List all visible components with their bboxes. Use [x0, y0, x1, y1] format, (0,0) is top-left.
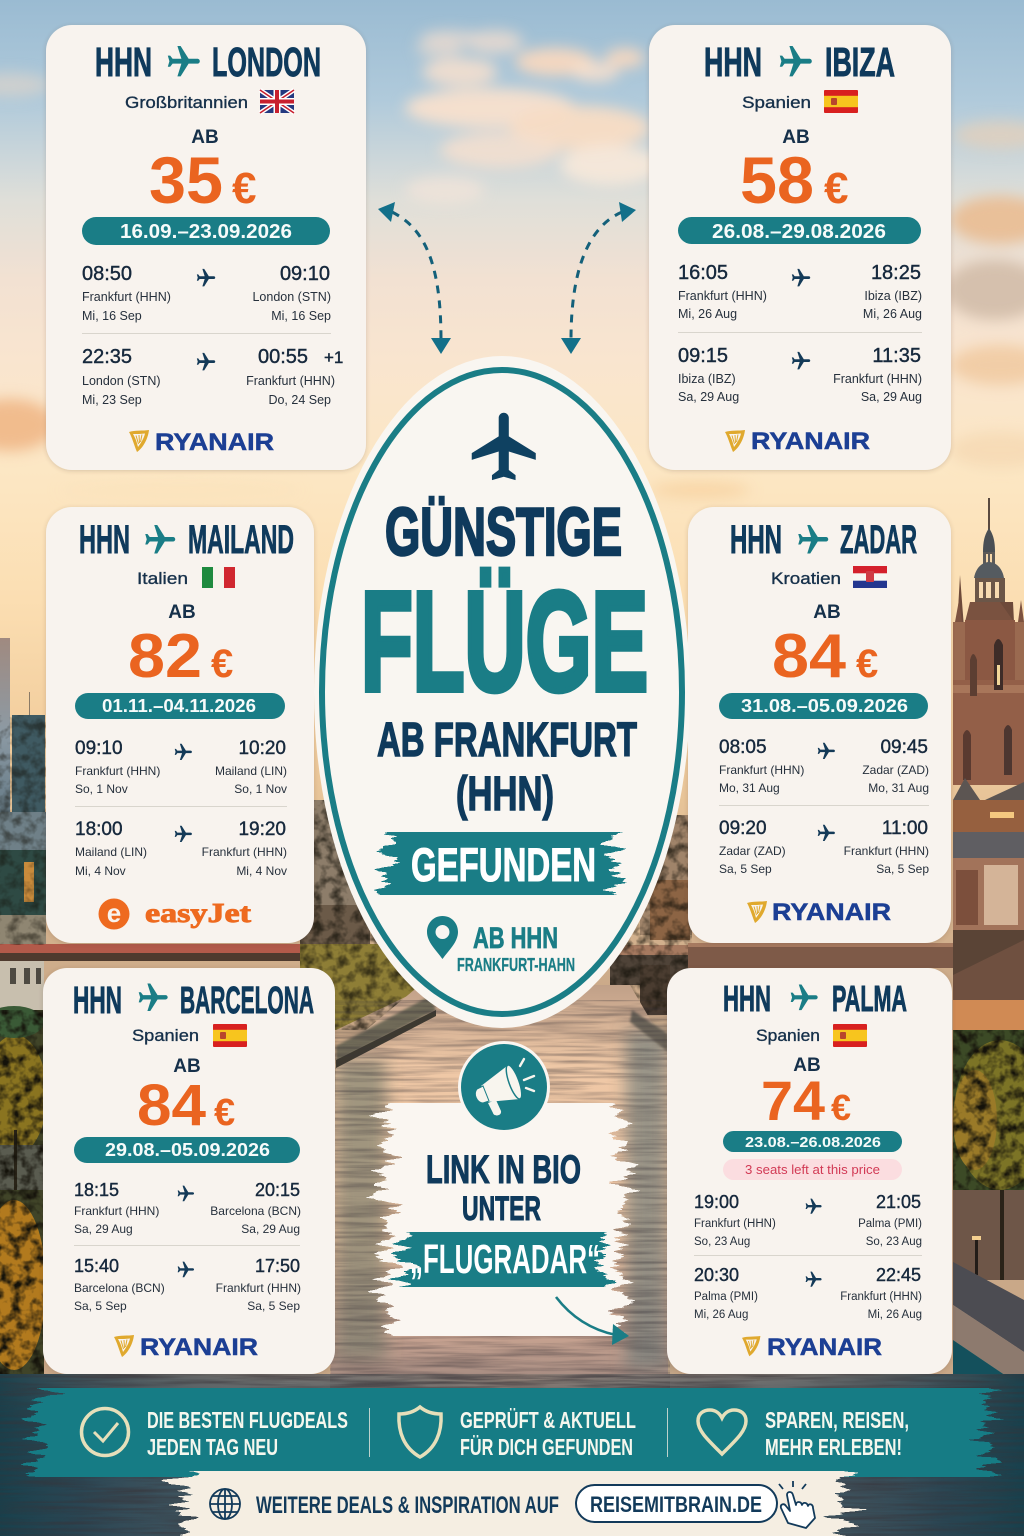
return flight: [74, 1256, 301, 1313]
card background: [43, 968, 335, 1374]
outbound flight: [75, 738, 287, 796]
route heading: HHN: [704, 39, 762, 85]
return flight: Sa, 29 Aug: [861, 390, 922, 404]
return flight: 20:30: [694, 1265, 739, 1285]
price: 35: [149, 143, 223, 217]
price: 82: [128, 622, 202, 691]
outbound flight: [82, 263, 331, 323]
return flight: London (STN): [82, 374, 161, 388]
outbound flight: Sa, 29 Aug: [241, 1222, 300, 1236]
origin: ab HHN: AB HHN: [473, 922, 558, 955]
brush banner: Flugradar: „FLUGRADAR“: [410, 1236, 600, 1282]
oval teal ring: [322, 370, 682, 1014]
availability notice: [723, 1159, 902, 1180]
price: AB: [191, 127, 219, 148]
outbound flight: Frankfurt (HHN): [75, 764, 160, 778]
outbound flight: [719, 737, 929, 795]
route heading: MAILAND: [188, 518, 294, 562]
benefit: daily deals: JEDEN TAG NEU: [147, 1434, 278, 1460]
text: unter: UNTER: [462, 1190, 541, 1228]
outbound flight: 10:20: [238, 738, 286, 759]
text: link in bio: LINK IN BIO: [426, 1148, 581, 1192]
country and flag: [125, 90, 294, 113]
return flight: 11:00: [882, 818, 928, 839]
route heading: [73, 980, 314, 1022]
return flight: Do, 24 Sep: [268, 393, 331, 407]
route heading: IBIZA: [825, 39, 895, 85]
price: €: [214, 1092, 235, 1134]
card background: [688, 507, 951, 943]
benefit: save and travel: SPAREN, REISEN,: [765, 1407, 909, 1433]
panel: London deal: [46, 25, 366, 470]
panel: central oval title badge: [314, 356, 690, 1028]
outbound flight: 18:15: [74, 1180, 119, 1200]
price: AB: [173, 1056, 201, 1077]
date pill: [723, 1131, 902, 1152]
card background: [649, 25, 951, 470]
country and flag: Spanien: [742, 93, 811, 112]
outbound flight: 08:50: [82, 263, 132, 285]
route heading: HHN: [73, 980, 122, 1022]
country and flag: [771, 566, 887, 588]
return flight: Frankfurt (HHN): [202, 845, 287, 859]
date pill: [74, 1137, 300, 1163]
price: AB: [793, 1055, 821, 1076]
panel: Palma deal: [667, 968, 952, 1374]
price: 74: [761, 1069, 825, 1132]
return flight: Sa, 5 Sep: [247, 1299, 300, 1313]
route heading: [730, 518, 917, 562]
outbound flight: Mailand (LIN): [215, 764, 287, 778]
route heading: BARCELONA: [180, 980, 314, 1022]
bottom water: [0, 1374, 1024, 1536]
brush banner: Flugradar: [403, 1232, 605, 1287]
outbound flight: Mi, 16 Sep: [82, 309, 142, 323]
return flight: Sa, 5 Sep: [719, 862, 772, 876]
country and flag: Spanien: [132, 1026, 199, 1045]
outbound flight: 08:05: [719, 737, 767, 758]
outbound flight: Frankfurt (HHN): [82, 290, 171, 304]
country and flag: [756, 1024, 867, 1047]
Ryanair logo: RYANAIR: [772, 899, 891, 926]
brush background: [36, 1388, 988, 1477]
country and flag: Großbritannien: [125, 93, 248, 112]
price: €: [856, 642, 878, 686]
price: €: [211, 642, 233, 686]
outbound flight: 09:45: [880, 737, 928, 758]
panel: Mailand deal: [46, 507, 314, 943]
price: [137, 1056, 235, 1138]
card background: [46, 507, 314, 943]
panel: website footer: [182, 1471, 844, 1536]
price: [149, 127, 256, 217]
panel: Barcelona deal: [43, 968, 335, 1374]
panel: link in bio: [386, 1041, 629, 1345]
return flight: Zadar (ZAD): [719, 844, 786, 858]
outbound flight: Mo, 31 Aug: [719, 781, 780, 795]
outbound flight: So, 1 Nov: [75, 782, 128, 796]
outbound flight: Frankfurt (HHN): [678, 289, 767, 303]
brush banner: gefunden: GEFUNDEN: [411, 838, 596, 891]
icon: megaphone: [458, 1041, 550, 1133]
route heading: [723, 978, 907, 1019]
availability notice: 3 seats left at this price: [745, 1162, 880, 1177]
return flight: [678, 345, 922, 404]
outbound flight: Mi, 26 Aug: [678, 307, 737, 321]
clouds: [0, 30, 1024, 498]
return flight: Frankfurt (HHN): [840, 1291, 922, 1303]
outbound flight: 18:25: [871, 262, 921, 284]
easyJet logo: [98, 898, 251, 930]
heading: HHN: (HHN): [456, 768, 554, 821]
outbound flight: 16:05: [678, 262, 728, 284]
return flight: Mi, 4 Nov: [75, 864, 126, 878]
route heading: [95, 39, 321, 85]
icon: globe: [210, 1489, 240, 1519]
heading: Günstige: GÜNSTIGE: [385, 494, 622, 570]
outbound flight: So, 1 Nov: [234, 782, 287, 796]
return flight: Palma (PMI): [694, 1291, 758, 1303]
return flight: Frankfurt (HHN): [246, 374, 335, 388]
outbound flight: So, 23 Aug: [866, 1236, 922, 1248]
city behind oval: [312, 800, 362, 930]
route heading: HHN: [730, 518, 782, 562]
price: AB: [168, 602, 196, 623]
return flight: 09:20: [719, 818, 767, 839]
Ryanair logo: RYANAIR: [155, 429, 274, 456]
button: website: [576, 1485, 777, 1522]
outbound flight: Mi, 26 Aug: [863, 307, 922, 321]
icon: location pin: [427, 916, 458, 959]
return flight: 11:35: [872, 345, 921, 367]
date pill: 01.11.–04.11.2026: [102, 696, 256, 716]
outbound flight: [74, 1180, 301, 1236]
benefit: verified: GEPRÜFT & AKTUELL: [460, 1407, 636, 1433]
panel: benefits band: [36, 1388, 988, 1477]
outbound flight: [678, 262, 922, 321]
return flight: Barcelona (BCN): [74, 1281, 165, 1295]
benefit: verified: [399, 1407, 636, 1460]
card background: [46, 25, 366, 470]
outbound flight: Ibiza (IBZ): [864, 289, 922, 303]
return flight: 22:35: [82, 346, 132, 368]
return flight: [719, 818, 929, 876]
heading: ab Frankfurt: AB FRANKFURT: [377, 714, 637, 767]
country and flag: Italien: [137, 569, 188, 588]
return flight: +1: [324, 348, 343, 367]
brush banner: gefunden: [388, 832, 614, 895]
price: 84: [772, 622, 847, 691]
route heading: [704, 39, 895, 85]
origin: Frankfurt-Hahn: FRANKFURT-HAHN: [457, 955, 575, 975]
price: [128, 602, 233, 691]
outbound flight: 19:00: [694, 1192, 739, 1212]
return flight: Mi, 26 Aug: [694, 1309, 748, 1321]
price: [740, 127, 848, 217]
return flight: Sa, 5 Sep: [876, 862, 929, 876]
date pill: [75, 693, 285, 719]
panel: Zadar deal: [688, 507, 951, 943]
Ryanair logo: RYANAIR: [767, 1334, 882, 1361]
price: AB: [813, 602, 841, 623]
date pill: 16.09.–23.09.2026: [120, 221, 292, 243]
return flight: Frankfurt (HHN): [844, 844, 929, 858]
price: €: [824, 164, 848, 213]
benefit: save and travel: [698, 1407, 909, 1460]
outbound flight: 09:10: [75, 738, 123, 759]
date pill: [719, 693, 928, 719]
route heading: ZADAR: [840, 518, 917, 562]
country and flag: Spanien: [756, 1026, 820, 1045]
route heading: [79, 518, 294, 562]
country and flag: [132, 1024, 247, 1047]
country and flag: [742, 90, 858, 113]
price: €: [232, 164, 256, 213]
benefit: verified: FÜR DICH GEFUNDEN: [460, 1434, 633, 1460]
card background: [667, 968, 952, 1374]
text: more deals: WEITERE DEALS & INSPIRATION AUF: [256, 1492, 559, 1519]
outbound flight: 20:15: [255, 1180, 300, 1200]
date pill: [82, 217, 330, 245]
return flight: 19:20: [238, 819, 286, 840]
outbound flight: London (STN): [252, 290, 331, 304]
return flight: Sa, 29 Aug: [678, 390, 739, 404]
return flight: [75, 819, 287, 878]
route heading: HHN: [95, 39, 152, 85]
outbound flight: [694, 1192, 922, 1248]
outbound flight: Palma (PMI): [858, 1218, 922, 1230]
return flight: [82, 346, 343, 407]
date pill: 23.08.–26.08.2026: [745, 1134, 881, 1151]
price: [772, 602, 878, 691]
route heading: LONDON: [212, 39, 321, 85]
outbound flight: So, 23 Aug: [694, 1236, 750, 1248]
route heading: PALMA: [832, 978, 907, 1019]
price: 58: [740, 143, 814, 217]
benefit: daily deals: [82, 1407, 348, 1460]
heading: Flüge: FLÜGE: [361, 562, 648, 720]
trees left: [0, 1006, 47, 1380]
return flight: Mi, 23 Sep: [82, 393, 142, 407]
return flight: Mi, 26 Aug: [868, 1309, 922, 1321]
country and flag: [137, 567, 235, 588]
icon: airplane: [472, 413, 536, 480]
skyline left: [0, 638, 700, 1030]
return flight: Ibiza (IBZ): [678, 372, 736, 386]
benefit: daily deals: DIE BESTEN FLUGDEALS: [147, 1407, 348, 1433]
return flight: 15:40: [74, 1256, 119, 1276]
outbound flight: 09:10: [280, 263, 330, 285]
outbound flight: Zadar (ZAD): [862, 763, 929, 777]
return flight: 17:50: [255, 1256, 300, 1276]
arrowheads on dashed arrows: [378, 202, 636, 354]
return flight: Frankfurt (HHN): [833, 372, 922, 386]
brush background: [386, 1103, 622, 1336]
price: AB: [782, 127, 810, 148]
icon: clicking hand: [779, 1481, 815, 1528]
outbound flight: Mo, 31 Aug: [868, 781, 929, 795]
date pill: 29.08.–05.09.2026: [105, 1140, 270, 1160]
return flight: Sa, 5 Sep: [74, 1299, 127, 1313]
return flight: 22:45: [876, 1265, 921, 1285]
return flight: Mi, 4 Nov: [236, 864, 287, 878]
panel: Ibiza deal: [649, 25, 951, 470]
outbound flight: Frankfurt (HHN): [74, 1204, 159, 1218]
return flight: Frankfurt (HHN): [216, 1281, 301, 1295]
return flight: 18:00: [75, 819, 123, 840]
outbound flight: Mi, 16 Sep: [271, 309, 331, 323]
benefit: save and travel: MEHR ERLEBEN!: [765, 1434, 902, 1460]
oval background: [314, 356, 690, 1028]
price: 84: [137, 1073, 206, 1138]
arrow: dashed from oval to London and Ibiza deals: [392, 212, 622, 340]
Ryanair logo: RYANAIR: [751, 428, 870, 455]
easyJet logo: e: [107, 898, 121, 928]
price: [761, 1055, 851, 1132]
return flight: 09:15: [678, 345, 728, 367]
return flight: 00:55: [258, 346, 308, 368]
date pill: [678, 217, 921, 244]
return flight: [694, 1265, 922, 1321]
easyJet logo: easyJet: [145, 898, 251, 928]
route heading: HHN: [723, 978, 771, 1019]
date pill: 26.08.–29.08.2026: [712, 221, 886, 243]
outbound flight: 21:05: [876, 1192, 921, 1212]
river: [330, 985, 668, 1400]
return flight: Mailand (LIN): [75, 845, 147, 859]
country and flag: Kroatien: [771, 569, 841, 588]
price: €: [831, 1087, 851, 1128]
outbound flight: Frankfurt (HHN): [719, 763, 804, 777]
button: website: REISEMITBRAIN.DE: [590, 1492, 762, 1517]
date pill: 31.08.–05.09.2026: [741, 696, 908, 716]
brush background: [182, 1471, 844, 1536]
cathedral and old town right: [688, 498, 1024, 1400]
outbound flight: Frankfurt (HHN): [694, 1218, 776, 1230]
outbound flight: Barcelona (BCN): [210, 1204, 301, 1218]
route heading: HHN: [79, 518, 130, 562]
outbound flight: Sa, 29 Aug: [74, 1222, 133, 1236]
arrow: curved to the right: [556, 1297, 629, 1345]
Ryanair logo: RYANAIR: [140, 1334, 258, 1361]
